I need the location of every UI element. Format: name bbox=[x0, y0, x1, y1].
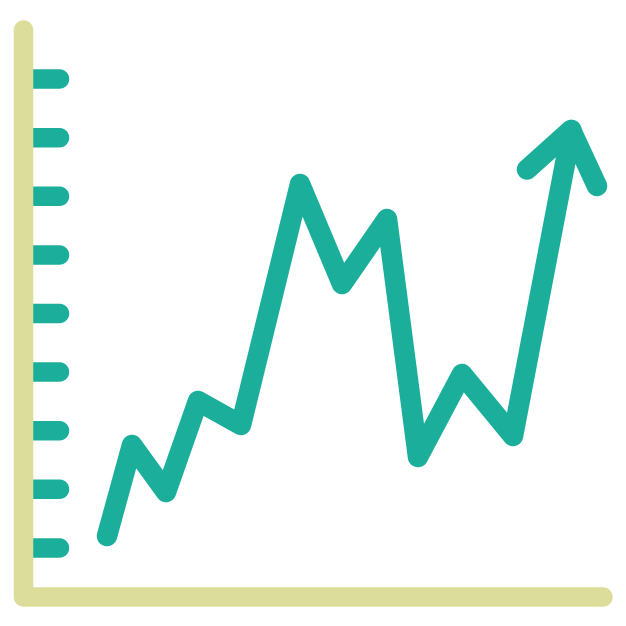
data line bbox=[107, 130, 572, 536]
y axis tick marks bbox=[30, 79, 60, 548]
arrowhead bbox=[527, 130, 597, 186]
rising data line with arrow bbox=[107, 130, 597, 536]
